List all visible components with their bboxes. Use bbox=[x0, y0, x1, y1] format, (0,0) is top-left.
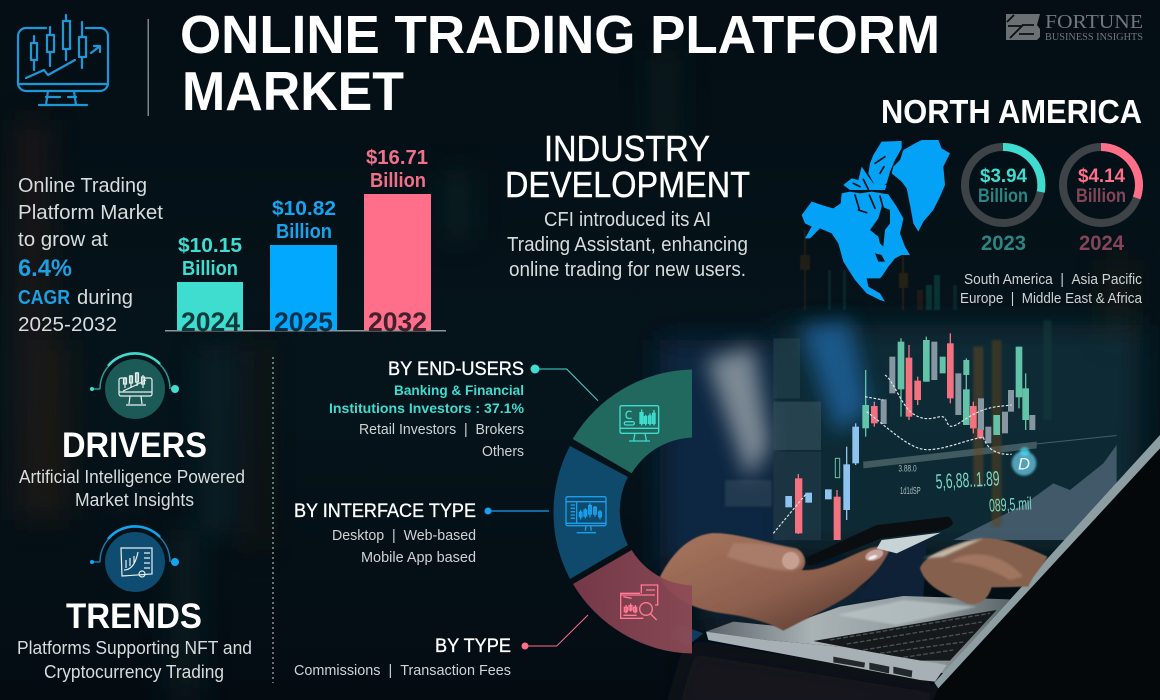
bar chart: 2032 bbox=[368, 307, 427, 337]
dashboard glow bbox=[660, 325, 1140, 630]
logo: Fortune Business Insights: BUSINESS INSIGHTS bbox=[1045, 32, 1143, 43]
donut: 2023: $3.94 bbox=[980, 166, 1027, 187]
trends heading: TRENDS bbox=[66, 597, 202, 636]
growth statement: Platform Market bbox=[18, 202, 163, 224]
bar chart: 2024 bbox=[181, 307, 240, 337]
donut: 2024: $4.14 bbox=[1078, 166, 1125, 187]
by end-users: Retail Investors | Brokers bbox=[359, 421, 524, 438]
drivers icon bbox=[90, 353, 179, 419]
north america heading: NORTH AMERICA bbox=[881, 93, 1142, 130]
trends text bbox=[17, 638, 252, 682]
industry development: Trading Assistant, enhancing bbox=[507, 234, 748, 256]
map: north america bbox=[802, 140, 950, 302]
drivers text bbox=[19, 467, 245, 510]
header divider bbox=[148, 19, 149, 116]
holographic chart: 5,6,88..1.89 bbox=[935, 467, 1000, 494]
table bbox=[670, 647, 937, 700]
growth statement: during bbox=[77, 287, 133, 309]
donut: 2024 bbox=[1063, 147, 1139, 255]
laptop front edge bbox=[706, 632, 947, 682]
by end-users bbox=[329, 359, 598, 460]
growth statement: 6.4% bbox=[18, 255, 72, 282]
industry development: INDUSTRY bbox=[544, 128, 710, 169]
section divider bbox=[272, 357, 274, 683]
title: MARKET bbox=[182, 60, 404, 122]
bar chart: $10.15 bbox=[178, 235, 242, 257]
donut segment: interface type bbox=[553, 446, 628, 579]
growth statement: CAGR bbox=[18, 287, 70, 309]
by type: Commissions | Transaction Fees bbox=[294, 662, 511, 679]
other regions: South America | Asia Pacific bbox=[964, 271, 1142, 288]
growth statement: Online Trading bbox=[18, 175, 147, 197]
trends text: Platforms Supporting NFT and bbox=[17, 638, 252, 658]
industry development: CFI introduced its AI bbox=[544, 209, 711, 231]
by interface type: Desktop | Web-based bbox=[332, 527, 476, 544]
holographic chart: 3.88.0 bbox=[898, 464, 917, 474]
growth statement bbox=[18, 175, 163, 336]
photo: hands, laptop and holographic chart bbox=[660, 320, 1160, 700]
trends text: Cryptocurrency Trading bbox=[44, 662, 224, 682]
donut: 2023: 2023 bbox=[981, 232, 1026, 255]
by end-users: BY END-USERS bbox=[388, 359, 524, 380]
holographic chart: 1d1dSP bbox=[900, 486, 921, 497]
phone bbox=[877, 533, 941, 553]
title bbox=[180, 5, 940, 122]
drivers text: Market Insights bbox=[75, 490, 194, 510]
donut: 2023 bbox=[965, 147, 1041, 255]
header icon: candlestick monitor bbox=[18, 15, 108, 105]
drivers heading: DRIVERS bbox=[62, 426, 207, 465]
other regions bbox=[960, 271, 1143, 307]
by end-users: Banking & Financial bbox=[394, 382, 524, 398]
industry development: online trading for new users. bbox=[509, 259, 746, 281]
laptop deck bbox=[706, 596, 1010, 673]
laptop lid bbox=[930, 448, 1160, 700]
title: ONLINE TRADING PLATFORM bbox=[180, 5, 940, 65]
laptop and hands bbox=[660, 435, 1160, 700]
logo: Fortune Business Insights: FORTUNE bbox=[1045, 11, 1143, 33]
bar chart bbox=[165, 147, 446, 337]
donut segment: type bbox=[573, 550, 692, 654]
industry development: DEVELOPMENT bbox=[505, 164, 750, 205]
industry development bbox=[505, 128, 750, 281]
logo: Fortune Business Insights bbox=[1006, 11, 1143, 43]
bar chart: Billion bbox=[182, 258, 238, 280]
bar chart: Billion bbox=[370, 170, 426, 192]
right hand bbox=[920, 538, 1047, 604]
holographic chart: 089,5.mil bbox=[988, 493, 1032, 516]
trends icon bbox=[90, 526, 179, 592]
left hand bbox=[660, 533, 889, 631]
by end-users: Institutions Investors : 37.1% bbox=[329, 400, 525, 416]
by interface type: BY INTERFACE TYPE bbox=[294, 501, 476, 522]
bar chart: $16.71 bbox=[366, 147, 428, 169]
drivers text: Artificial Intelligence Powered bbox=[19, 467, 245, 487]
sleeve bbox=[857, 542, 927, 600]
donut segment: end-users bbox=[573, 370, 692, 473]
growth statement: to grow at bbox=[18, 229, 108, 251]
by interface type bbox=[294, 501, 549, 566]
holographic chart: D bbox=[1018, 454, 1030, 473]
bar chart: Billion bbox=[276, 221, 332, 243]
donut: 2023: Billion bbox=[978, 186, 1028, 207]
bar chart: 2025 bbox=[274, 307, 333, 337]
by interface type: Mobile App based bbox=[361, 549, 476, 566]
by type bbox=[294, 615, 588, 679]
donut: 2024: 2024 bbox=[1079, 232, 1124, 255]
bar chart: $10.82 bbox=[272, 198, 336, 220]
donut: 2024: Billion bbox=[1076, 186, 1126, 207]
other regions: Europe | Middle East & Africa bbox=[960, 290, 1143, 307]
by end-users: Others bbox=[482, 443, 524, 460]
by type: BY TYPE bbox=[435, 636, 511, 657]
holographic chart bbox=[707, 320, 1117, 540]
growth statement: 2025-2032 bbox=[18, 314, 117, 336]
